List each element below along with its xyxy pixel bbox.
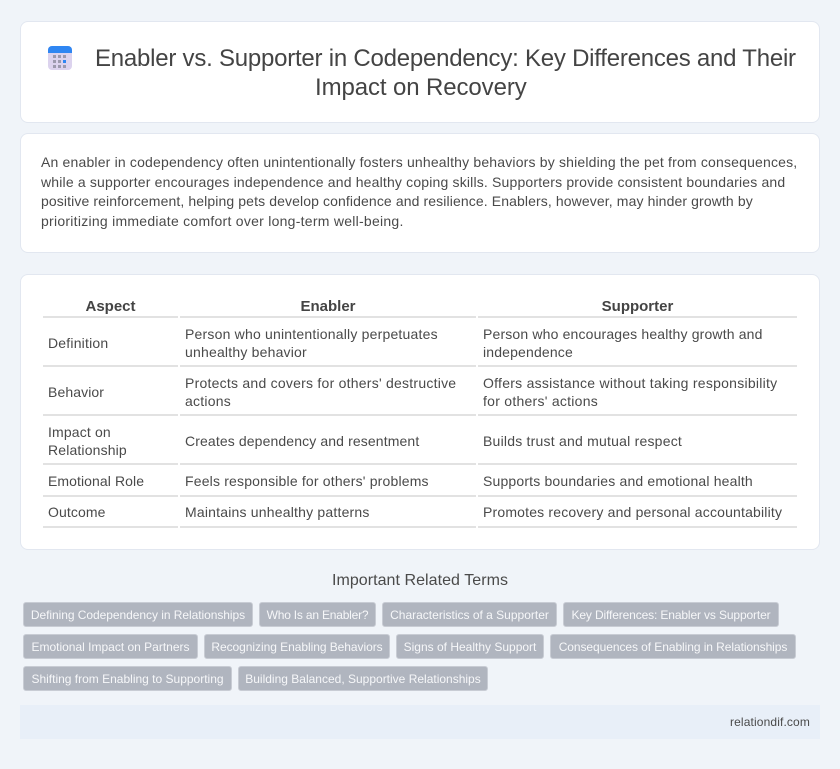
intro text: while a supporter encourages independence and healthy coping skills. Supporters provide consistent boundaries and xyxy=(41,174,785,190)
table header xyxy=(85,298,674,315)
panel: comparison table xyxy=(20,274,820,550)
text: Maintains unhealthy patterns xyxy=(185,504,370,520)
text: Promotes recovery and personal accountability xyxy=(483,504,782,520)
icon: calendar xyxy=(48,46,72,70)
row: outcome: Outcome xyxy=(48,504,106,520)
tag list: Consequences of Enabling in Relationships xyxy=(559,640,787,654)
text: Supports boundaries and emotional health xyxy=(483,473,753,489)
tag list: Emotional Impact on Partners xyxy=(31,640,190,654)
row: behavior: Behavior xyxy=(48,384,104,400)
text: unhealthy behavior xyxy=(185,344,307,360)
tag list: Who Is an Enabler? xyxy=(267,608,368,622)
text: Builds trust and mutual respect xyxy=(483,433,682,449)
text: Person who unintentionally perpetuates xyxy=(185,326,438,342)
footer xyxy=(20,705,820,739)
tag list: Characteristics of a Supporter xyxy=(390,608,549,622)
text: Offers assistance without taking responsibility xyxy=(483,375,777,391)
text: Feels responsible for others' problems xyxy=(185,473,429,489)
tag list: Signs of Healthy Support xyxy=(404,640,536,654)
tag list: Key Differences: Enabler vs Supporter xyxy=(571,608,771,622)
row: emotional role: Emotional Role xyxy=(48,473,144,489)
intro text: positive reinforcement, helping pets develop confidence and resilience. Enablers, however, may hinder growth by xyxy=(41,193,753,209)
tag list xyxy=(23,602,796,691)
tag list: Recognizing Enabling Behaviors xyxy=(211,640,383,654)
text: Person who encourages healthy growth and xyxy=(483,326,763,342)
table header: Aspect xyxy=(85,298,136,315)
intro text: An enabler in codependency often unintentionally fosters unhealthy behaviors by shielding the pet from consequences, xyxy=(41,154,797,170)
text: Creates dependency and resentment xyxy=(185,433,419,449)
text: actions xyxy=(185,393,231,409)
row: impact on relationship: Relationship xyxy=(48,442,127,458)
row: impact on relationship xyxy=(48,424,127,458)
title line 2: Impact on Recovery xyxy=(315,74,527,101)
text: for others' actions xyxy=(483,393,598,409)
tag list: Building Balanced, Supportive Relationships xyxy=(245,672,481,686)
row: impact on relationship: Impact on xyxy=(48,424,111,440)
table header: Enabler xyxy=(300,298,356,315)
intro text: prioritizing immediate comfort over long-term well-being. xyxy=(41,213,404,229)
text: Protects and covers for others' destructive xyxy=(185,375,456,391)
heading: related terms: Important Related Terms xyxy=(332,572,508,589)
panel: intro xyxy=(20,133,820,253)
tag list: Defining Codependency in Relationships xyxy=(31,608,245,622)
row: definition: Definition xyxy=(48,335,108,351)
footer source: relationdif.com xyxy=(730,715,810,729)
title: Enabler vs. Supporter in Codependency: Key Differences and Their xyxy=(95,45,796,72)
panel: header xyxy=(20,21,820,123)
table header: Supporter xyxy=(602,298,673,315)
intro text xyxy=(41,154,797,229)
tag list: Shifting from Enabling to Supporting xyxy=(31,672,224,686)
text: independence xyxy=(483,344,573,360)
